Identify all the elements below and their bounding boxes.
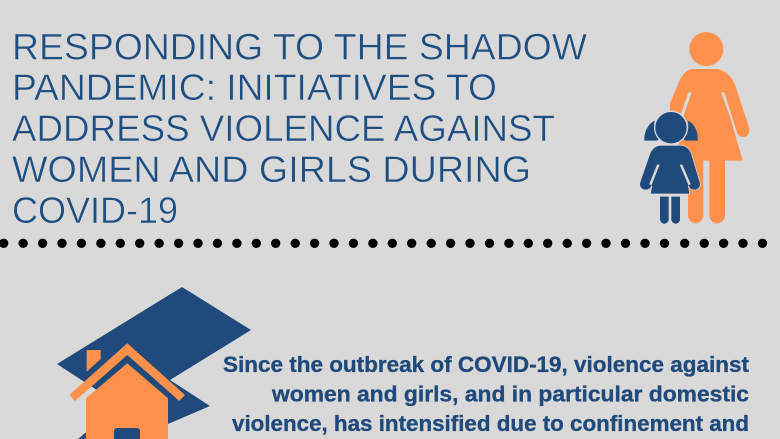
title: ADDRESS VIOLENCE AGAINST: [12, 108, 555, 149]
icon: house with shadow: [57, 287, 251, 439]
house shadow: [57, 287, 251, 439]
icon: girl: [640, 111, 700, 224]
dotted divider: [0, 239, 767, 248]
title: WOMEN AND GIRLS DURING: [12, 149, 531, 190]
intro text: [223, 352, 750, 436]
intro text: women and girls, and in particular domestic: [271, 382, 749, 406]
title: COVID-19: [12, 190, 178, 231]
title: RESPONDING TO THE SHADOW: [12, 26, 587, 68]
title: PANDEMIC: INITIATIVES TO: [12, 67, 497, 108]
house roof: [69, 343, 185, 401]
intro text: violence, has intensified due to confinement and: [232, 411, 749, 436]
title: [12, 26, 587, 231]
icon: woman and girl: [640, 32, 749, 224]
house body: [86, 363, 168, 439]
icon: woman: [670, 32, 749, 223]
house chimney: [87, 350, 101, 372]
house door: [114, 428, 140, 439]
intro text: Since the outbreak of COVID-19, violence against: [223, 352, 750, 377]
